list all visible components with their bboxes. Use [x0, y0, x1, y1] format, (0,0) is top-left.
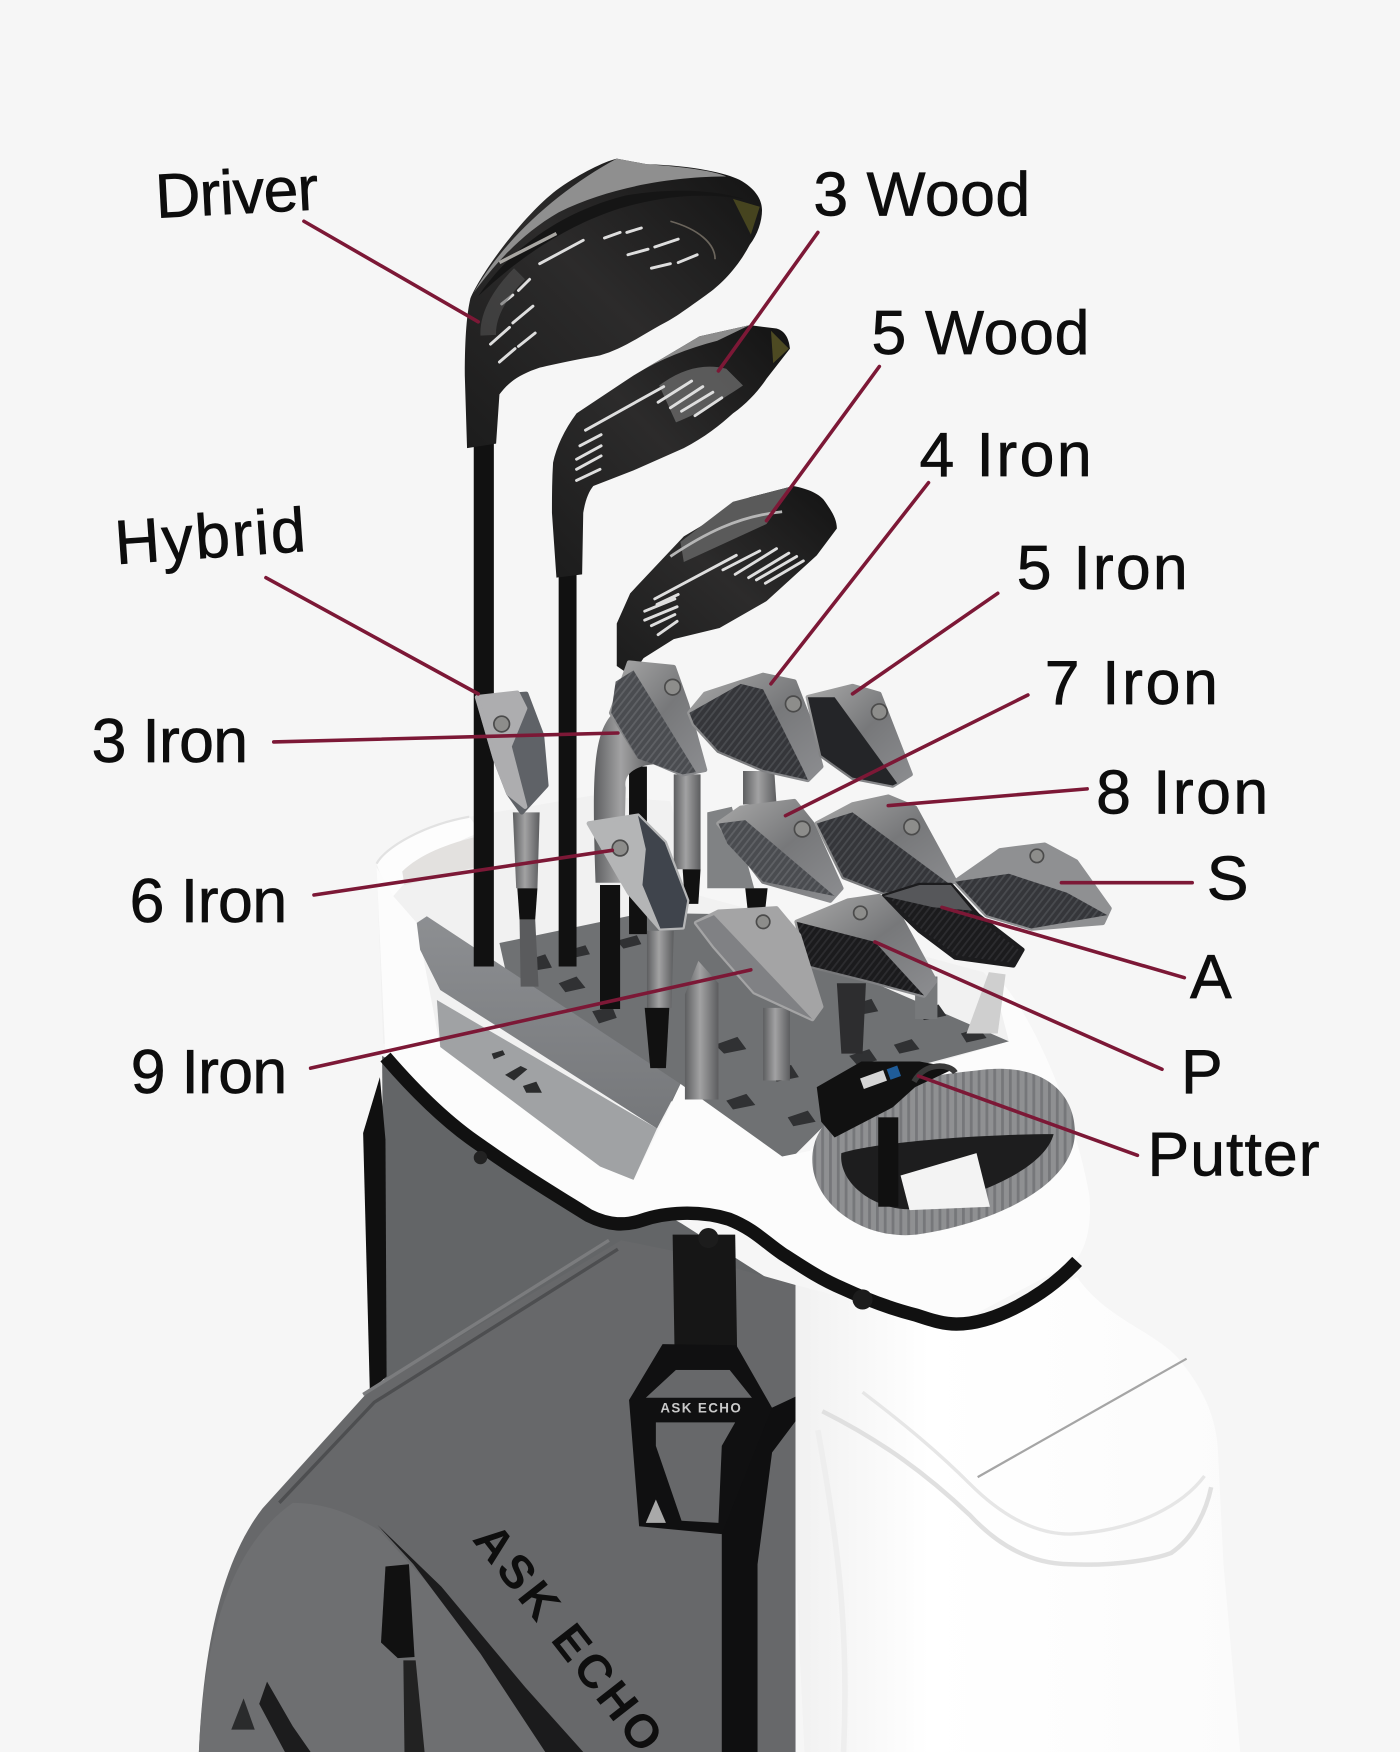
tag: ASK ECHO	[660, 1400, 741, 1415]
4 iron hosel	[743, 771, 777, 804]
label: Hybrid	[112, 495, 478, 694]
label: S: S	[1207, 843, 1248, 913]
label: Hybrid: Hybrid	[112, 495, 308, 578]
zip pulls	[381, 1564, 415, 1658]
label: 3 Wood	[718, 160, 1030, 371]
tray recess under handle	[437, 1000, 657, 1180]
club: hybrid head	[477, 693, 546, 812]
driver sole lines	[491, 228, 697, 362]
club: 3 wood	[552, 325, 790, 578]
label: 5 Wood	[766, 298, 1089, 521]
label: A	[942, 907, 1232, 1012]
back rim	[377, 796, 1039, 1117]
tag	[629, 1344, 772, 1534]
a wedge hosel	[966, 972, 1006, 1034]
label: 3 Iron: 3 Iron	[92, 706, 248, 776]
pocket logo	[231, 1698, 255, 1730]
label: Putter	[918, 1076, 1320, 1189]
pocket details	[978, 1359, 1187, 1477]
club: 8 iron head	[817, 797, 955, 893]
label: Driver	[153, 153, 478, 322]
main zip	[378, 1525, 583, 1752]
label: 4 Iron	[771, 420, 1092, 684]
rivets	[698, 1228, 718, 1248]
panel seam	[279, 1249, 618, 1503]
p wedge shaft	[837, 983, 866, 1054]
label: 7 Iron: 7 Iron	[1045, 648, 1218, 718]
label: 8 Iron: 8 Iron	[1096, 757, 1268, 827]
club shafts	[474, 441, 1006, 1099]
label: 6 Iron: 6 Iron	[130, 866, 287, 936]
label: A: A	[1190, 942, 1232, 1012]
3 wood shaft	[559, 570, 577, 967]
club: pitching wedge	[797, 896, 935, 996]
3 wood face highlight	[659, 367, 743, 422]
left black edge strip	[363, 1077, 387, 1391]
golf bag	[199, 796, 1240, 1752]
club: approach wedge	[884, 885, 1022, 965]
putter well	[812, 1069, 1075, 1235]
strap	[673, 1235, 737, 1370]
club: 6 iron head	[589, 816, 687, 929]
club: putter	[817, 1061, 955, 1137]
5 wood crown	[680, 486, 793, 562]
right black strip	[722, 1397, 796, 1752]
second pocket zip	[259, 1682, 311, 1752]
driver crown	[474, 159, 726, 293]
label: 3 Wood: 3 Wood	[813, 160, 1030, 230]
lower left pocket	[199, 1503, 581, 1752]
cloth in well	[901, 1153, 990, 1210]
3 wood crown	[634, 325, 750, 375]
label: Driver: Driver	[153, 153, 320, 232]
hybrid shaft	[513, 812, 540, 888]
white bag body	[796, 1277, 1240, 1752]
label: 9 Iron	[131, 970, 751, 1107]
club: 5 wood	[617, 486, 837, 676]
label: P	[875, 942, 1223, 1107]
club: 9 iron head	[696, 908, 821, 1019]
3 iron left hosel	[594, 715, 654, 883]
8 iron hosel	[763, 1008, 790, 1080]
label: 4 Iron: 4 Iron	[920, 420, 1092, 490]
3 iron right hosel	[674, 774, 701, 869]
9 iron hosel	[685, 961, 718, 1099]
label: 3 Iron	[92, 706, 618, 776]
label: 7 Iron	[785, 648, 1218, 816]
label: 5 Iron: 5 Iron	[1017, 533, 1188, 603]
7 iron hosel	[707, 807, 754, 888]
club: sand wedge	[955, 845, 1109, 929]
grey handle	[417, 916, 680, 1129]
club: 5 iron head	[808, 686, 911, 785]
rear grey panel	[382, 1056, 796, 1564]
club: 7 iron head	[718, 801, 841, 901]
6 iron shaft and grip	[647, 931, 674, 1008]
label: 8 Iron	[888, 757, 1268, 827]
club: driver	[465, 159, 762, 448]
label: 6 Iron	[130, 850, 612, 936]
club: 3 iron head	[611, 663, 705, 774]
club: 4 iron head	[689, 675, 821, 780]
black shafts behind irons	[600, 885, 620, 1009]
label: 5 Iron	[853, 533, 1188, 694]
front white collar	[377, 867, 1090, 1324]
label: Putter: Putter	[1147, 1119, 1320, 1189]
label: P: P	[1181, 1037, 1223, 1107]
front grey panel	[199, 1240, 796, 1752]
label: 9 Iron: 9 Iron	[131, 1037, 287, 1107]
label: 5 Wood: 5 Wood	[872, 298, 1089, 368]
collar black trim	[385, 1057, 1077, 1324]
driver shaft	[474, 441, 494, 967]
club grid tray	[499, 913, 1009, 1162]
